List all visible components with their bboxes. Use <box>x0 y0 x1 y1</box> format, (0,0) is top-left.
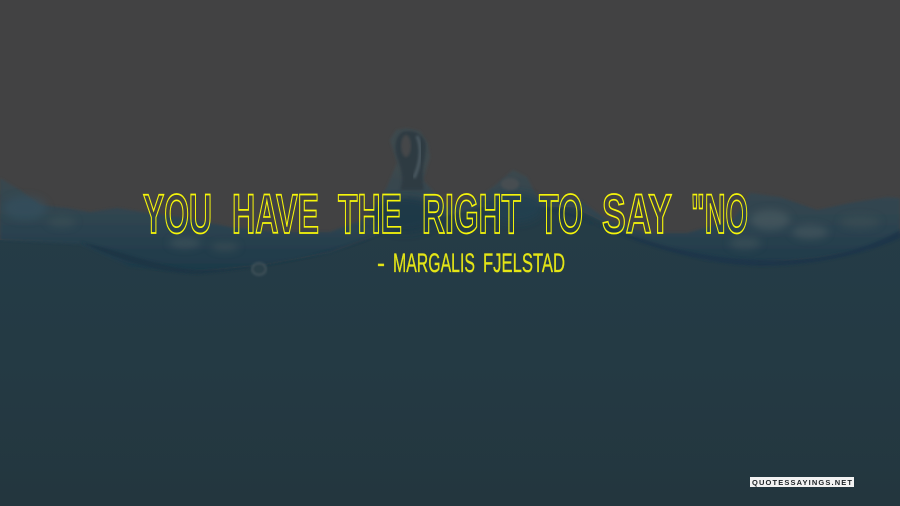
splash detail <box>501 178 519 190</box>
quote heading: RIGHT <box>422 182 521 245</box>
watermark badge: QUOTESSAYINGS.NET <box>752 478 852 487</box>
dark underside of the wave, left <box>80 232 383 274</box>
attribution: MARGALIS <box>393 248 475 278</box>
attribution: - <box>377 248 385 278</box>
right wave highlights <box>729 210 880 249</box>
wave crest band <box>0 128 900 272</box>
quote heading: TO <box>539 182 583 245</box>
quote heading: THE <box>338 182 402 245</box>
dark mass beneath splash <box>371 197 439 233</box>
air bubble <box>252 263 266 275</box>
quote heading: "NO <box>691 182 748 245</box>
attribution: FJELSTAD <box>483 248 565 278</box>
quote heading: SAY <box>602 182 672 245</box>
quote heading <box>143 182 748 245</box>
left wave highlights <box>3 196 239 251</box>
quote heading: YOU <box>143 182 212 245</box>
dark underside of the wave, right <box>480 203 900 266</box>
water droplet column <box>395 131 426 190</box>
water below the wave <box>0 205 900 506</box>
quote heading: HAVE <box>232 182 319 245</box>
background: water body and wave splash <box>0 128 900 506</box>
